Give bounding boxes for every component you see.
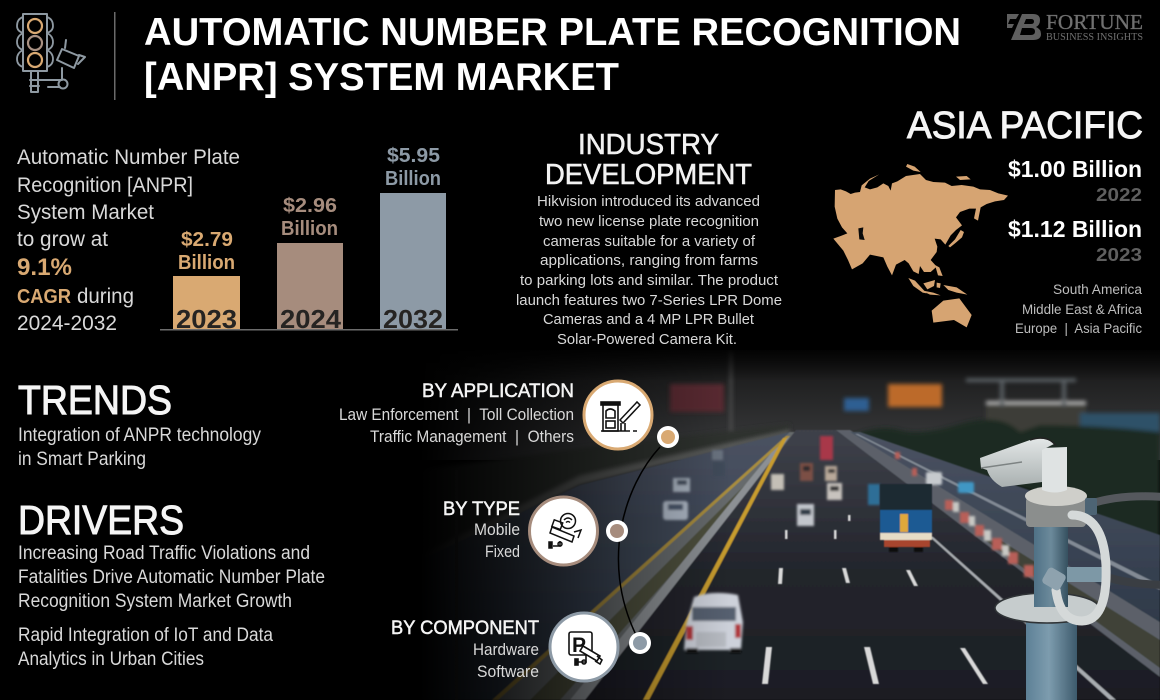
left carriageway [420,432,790,700]
upper pole [1034,525,1068,607]
panel: drivers: Rapid Integration of IoT and Data [18,625,273,646]
main road [585,430,1160,700]
panel: trends: TRENDS [18,377,172,423]
pipe connector [1085,498,1097,515]
logo: Fortune Business Insights [1007,10,1143,43]
text block: industry development: cameras suitable for a variety of [543,234,756,250]
bar 2024 [277,195,343,334]
second rear cable [1110,578,1160,585]
bar 2032: $5.95 [387,145,440,167]
bar 2024: Billion [281,218,338,240]
heading: Asia Pacific: ASIA PACIFIC [907,105,1143,147]
text block: market growth summary: Recognition [ANPR] [17,174,193,197]
title [144,11,961,99]
lower pole [1026,622,1077,700]
heading: industry development: INDUSTRY [578,129,719,161]
segment: by type: Mobile [474,521,520,539]
text block: market growth summary: CAGR [17,286,72,308]
right grass strip [985,540,1160,668]
icon: parking camera: P [572,634,586,657]
segment: by application: Law Enforcement | Toll Collection [339,406,574,424]
icon: parking camera [550,613,618,681]
white cable [1056,515,1106,621]
median concrete [497,432,797,700]
bar 2023: $2.79 [181,229,233,251]
stat: 2022 value [1008,156,1142,205]
camera hood line [981,462,1022,468]
segment: by component: Software [477,663,539,681]
distant vehicles [663,436,974,526]
text block: regions [1015,282,1142,336]
segment: by application [339,381,679,449]
text block: industry development: to parking lots and similar. The product [520,273,778,289]
bar 2023: Billion [178,252,235,274]
conduit joint [1067,567,1107,582]
stat: 2022 value: 2022 [1096,185,1142,205]
panel: drivers: Recognition System Market Growth [18,591,292,612]
bar 2032: 2032 [383,304,443,334]
marker dot [606,520,628,542]
text block: market growth summary: 2024-2032 [17,312,117,335]
billboard red [670,384,724,412]
bar 2032: Billion [385,168,441,190]
panel: drivers: Analytics in Urban Cities [18,649,204,670]
heading: industry development: DEVELOPMENT [545,159,752,191]
icon: wifi camera [530,497,598,565]
text block: market growth summary: 9.1% [17,254,72,281]
title: [ANPR] SYSTEM MARKET [144,56,619,99]
building [984,402,1088,433]
panel: drivers [18,497,325,670]
segment: by component: Hardware [473,641,539,659]
text block: industry development [516,194,782,348]
lane markings [762,515,988,684]
camera dark edge [1030,438,1056,446]
foreground white SUV [684,593,743,653]
panel: trends [18,377,261,470]
flange [995,593,1099,623]
text block: industry development: launch features two 7-Series LPR Dome [516,293,782,309]
text block: regions: Europe | Asia Pacific [1015,321,1142,336]
title: AUTOMATIC NUMBER PLATE RECOGNITION [144,11,961,54]
header divider [114,12,116,100]
bar 2023: 2023 [176,304,237,334]
right median band [836,430,1160,677]
segment: by component [391,613,651,681]
panel: trends: Integration of ANPR technology [18,425,261,446]
segment: by type: Fixed [485,543,520,561]
photo fade: top [420,345,1160,381]
junction box top [1025,486,1087,506]
logo: Fortune Business Insights: BUSINESS INSIGHTS [1046,32,1143,43]
cable fitting [1041,566,1067,592]
segment: by type: BY TYPE [443,499,520,520]
stat: 2023 value: $1.12 Billion [1008,216,1142,242]
segment: by application: BY APPLICATION [422,381,574,402]
junction box [1026,497,1086,527]
surveillance camera on pole [980,438,1160,700]
bracket [1042,447,1067,492]
bar 2024: 2024 [280,304,342,334]
text block: market growth summary: System Market [17,201,154,224]
stat: 2023 value: 2023 [1096,245,1142,265]
icon: traffic light and camera [17,14,85,92]
text block: market growth summary: during [77,285,134,308]
far right carriageway [850,432,1160,622]
bar chart [160,145,458,334]
text block: industry development: Hikvision introduced its advanced [537,194,760,210]
stat: 2023 value [1008,216,1142,265]
text block: market growth summary [17,146,240,335]
marker dot [657,426,679,448]
rear dark cables [1090,496,1160,504]
logo: Fortune Business Insights: FORTUNE [1046,10,1143,34]
camera body [980,439,1054,487]
billboard orange [888,384,942,407]
stat: 2022 value: $1.00 Billion [1008,156,1142,182]
white edge line [930,537,1116,700]
panel: trends: in Smart Parking [18,449,146,470]
text block: industry development: applications, ranging from farms [540,253,758,269]
left side ghost poles [455,470,458,700]
photo fade: left [420,350,1160,700]
highway photo background [420,350,1160,700]
chart baseline [160,329,458,330]
marker dot [629,632,651,654]
bar 2032 [380,145,446,334]
segment: by component: BY COMPONENT [391,618,539,639]
red barriers [895,452,1034,577]
truck [880,484,932,552]
tree line [860,418,1160,536]
bar 2023 [173,229,240,334]
panel: drivers: Increasing Road Traffic Violations and [18,543,310,564]
map: Asia Pacific [833,164,1008,327]
text block: industry development: Cameras and a 4 MP LPR Bullet [543,312,754,328]
panel: drivers: DRIVERS [18,497,184,543]
text block: market growth summary: Automatic Number Plate [17,146,240,169]
bar 2024: $2.96 [283,195,337,217]
text block: regions: Middle East & Africa [1022,302,1142,317]
text block: industry development: two new license plate recognition [539,214,759,230]
left roadside land [471,431,764,526]
panel: drivers: Fatalities Drive Automatic Number Plate [18,567,325,588]
text block: market growth summary: to grow at [17,228,108,251]
icon: toll booth [584,381,652,449]
segmentation connector arc [618,447,660,635]
billboard blue [844,398,869,411]
text block: regions: South America [1053,282,1142,297]
segment: by type [443,497,628,565]
segment: by application: Traffic Management | Others [370,428,574,446]
heading: industry development [545,129,752,191]
text block: industry development: Solar-Powered Camera Kit. [557,332,737,348]
Caspian sea [858,227,865,240]
